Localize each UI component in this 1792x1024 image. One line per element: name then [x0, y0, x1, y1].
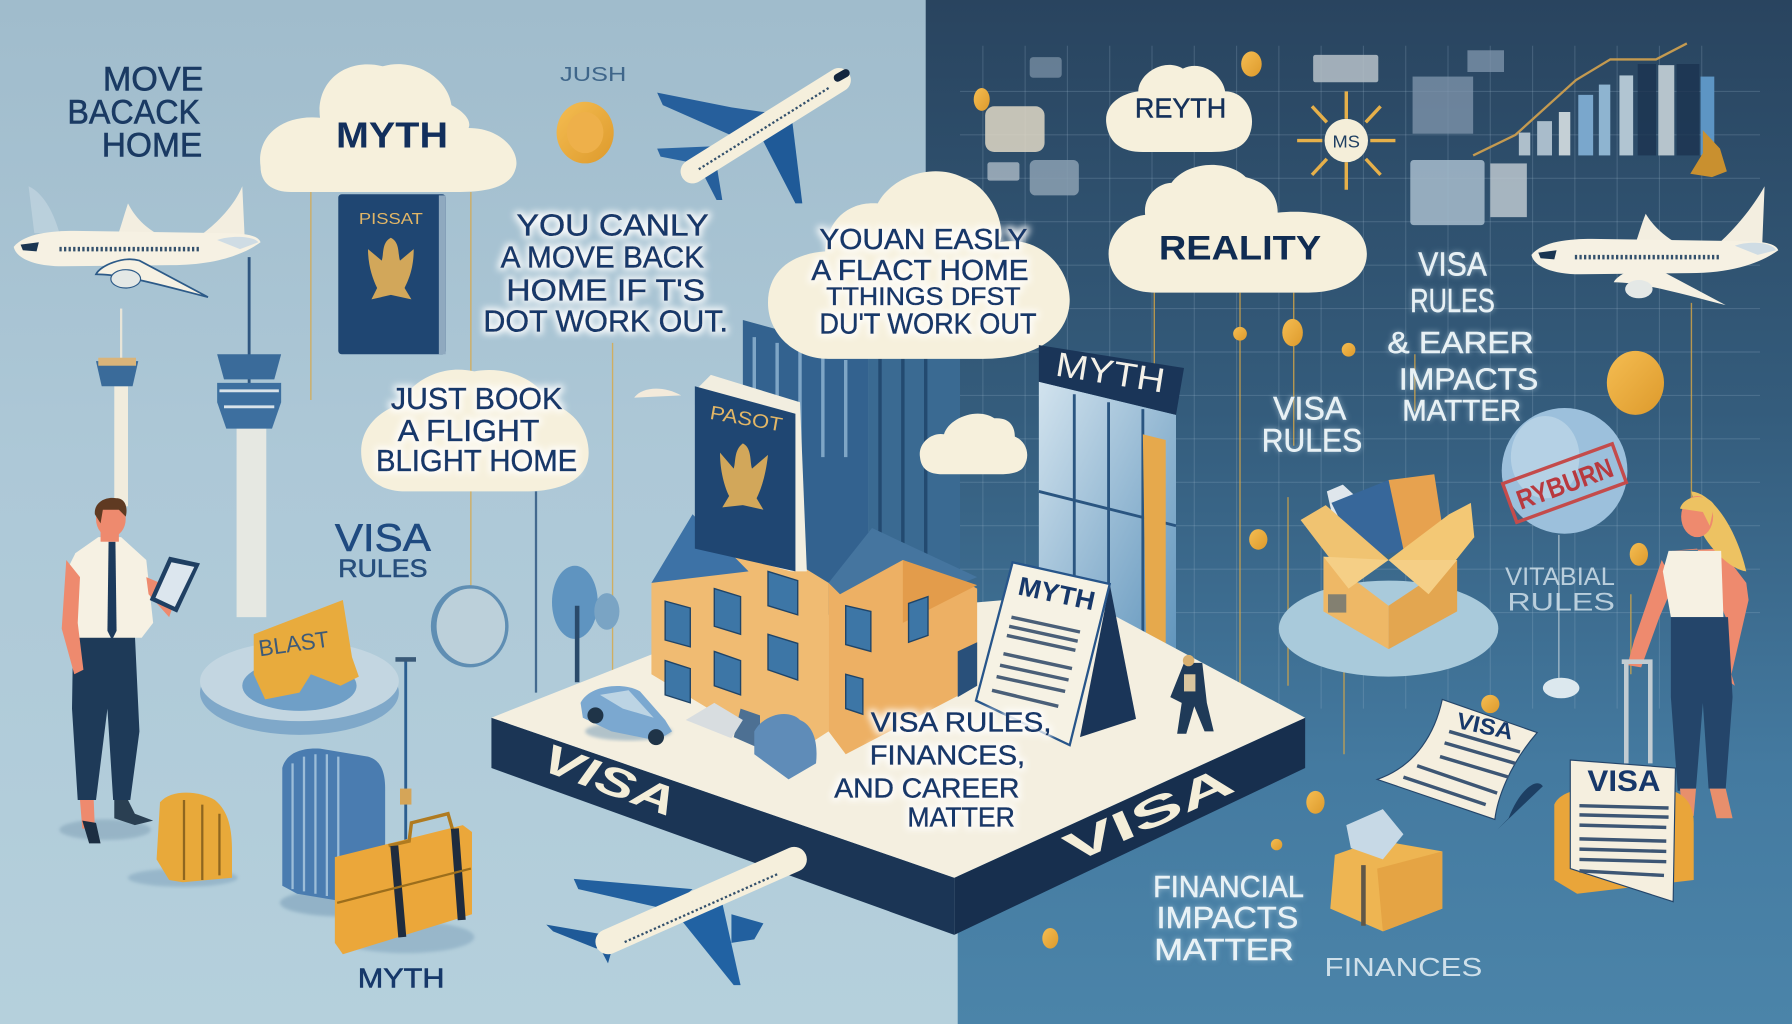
icon: small control tower: [96, 309, 138, 506]
label: myth on tower: MYTH: [1053, 346, 1167, 400]
text: visa rules career impacts: RULES: [1410, 283, 1495, 320]
person: man with tablet: [59, 498, 200, 843]
label: visa on right side: VISA: [1057, 757, 1240, 872]
document text lines: [1579, 806, 1669, 875]
icon: eagle emblem: [720, 443, 768, 510]
icon: small cloud: [920, 414, 1027, 474]
label: reyth: REYTH: [1135, 93, 1226, 124]
label: myth on document: MYTH: [1016, 571, 1098, 616]
text: visa rules career impacts: MATTER: [1402, 395, 1521, 428]
cloud: just book: [361, 370, 589, 491]
icon: large control tower: [217, 257, 281, 617]
label: visa rules left: VISA: [335, 517, 431, 560]
icon: airplane right: [1531, 186, 1778, 305]
text: visa rules finances career: AND CAREER: [834, 773, 1019, 804]
cloud: reality: [1109, 165, 1367, 293]
icon: tablet: [150, 557, 200, 613]
label: visa on left side: VISA: [536, 735, 683, 825]
label: stamp: RYBURN: [1512, 452, 1617, 516]
label: myth: MYTH: [336, 114, 448, 155]
icon: wrapped package: [1330, 809, 1442, 931]
text: vitabial rules: RULES: [1507, 588, 1615, 616]
icon: post base: [1543, 678, 1579, 698]
document text lines: [992, 617, 1080, 706]
text: you can only move back: YOU CANLY: [517, 207, 709, 242]
icon: myth document sign: [976, 562, 1136, 745]
icon: passport myth: [338, 194, 446, 354]
text: financial impacts: [1153, 869, 1304, 967]
label: visa: VISA: [1587, 765, 1661, 798]
building behind: [743, 320, 960, 640]
icon: car: [581, 686, 672, 745]
icon: clock disc: [431, 585, 509, 667]
text: financial impacts: MATTER: [1154, 932, 1294, 967]
platform: [491, 594, 1305, 935]
icon: gold coin top: [1241, 51, 1262, 77]
text: visa rules career impacts: & EARER: [1387, 325, 1534, 360]
icon: small gold coin: [974, 88, 990, 111]
icon: shrubs: [754, 714, 817, 779]
text: you can only move back: DOT WORK OUT.: [483, 303, 728, 338]
text: easy flight home: DU'T WORK OUT: [819, 309, 1037, 341]
icon: airplane top: [657, 73, 846, 203]
text: visa rules career impacts: VISA: [1418, 246, 1488, 283]
icon: entrance steps: [686, 703, 743, 738]
icon: passport on house: [695, 375, 807, 571]
icon: small orange suitcase: [128, 793, 238, 887]
text: financial impacts: FINANCIAL: [1153, 869, 1304, 904]
small wisp: [634, 389, 681, 398]
passport title: PASOT: [708, 402, 784, 436]
text: easy flight home: TTHINGS DFST: [826, 283, 1021, 311]
icon: gold coins: [1042, 319, 1664, 949]
heading: move back home: BACACK: [67, 93, 200, 131]
icon: house: [651, 514, 977, 779]
label: badge: MS: [1333, 131, 1360, 151]
text: visa rules reality: [1262, 390, 1362, 458]
panel: reality background: [926, 0, 1792, 1024]
text: visa rules finances career: [834, 706, 1051, 832]
icon: lamp post: [395, 657, 416, 862]
icon: visa paper: [1377, 699, 1543, 830]
icon: airplane bottom: [546, 859, 794, 985]
text: just book: A FLIGHT: [398, 413, 540, 448]
text: visa rules career impacts: IMPACTS: [1399, 362, 1538, 397]
text: just book: [376, 381, 577, 478]
text: easy flight home: YOUAN EASLY: [819, 224, 1027, 256]
reality grid: [960, 46, 1760, 709]
text: you can only move back: A MOVE BACK: [501, 239, 704, 274]
icon: blue suitcase: [280, 748, 406, 917]
text: you can only move back: HOME IF T'S: [506, 273, 705, 308]
text: visa rules finances career: FINANCES,: [870, 740, 1025, 771]
label: blast: BLAST: [257, 626, 331, 661]
heading: move back home: MOVE: [103, 60, 203, 98]
text: visa rules reality: VISA: [1273, 390, 1347, 426]
label: myth bottom: MYTH: [358, 962, 445, 993]
passport title: PISSAT: [359, 211, 423, 228]
cloud: easy flight home: [768, 171, 1070, 359]
cloud: myth: [260, 64, 516, 192]
icon: orange suitcase right: [1554, 789, 1694, 894]
icon: orange briefcase: [335, 814, 474, 954]
label: visa rules left: [335, 517, 431, 583]
icon: eagle emblem: [368, 238, 414, 299]
icon: airplane left: [14, 186, 261, 297]
icon: visa document: [1570, 760, 1675, 902]
text: easy flight home: [811, 224, 1037, 341]
icon: sun badge: [1297, 91, 1395, 190]
bar chart: [1473, 43, 1727, 177]
heading: move back home: HOME: [102, 127, 202, 165]
text: financial impacts: IMPACTS: [1157, 900, 1298, 935]
icon: glass tower with myth sign: [1039, 345, 1184, 665]
text: just book: BLIGHT HOME: [376, 443, 577, 478]
text: vitabial rules: VITABIAL: [1505, 563, 1615, 591]
icon: pedestal with blast card: [200, 600, 399, 735]
icon: floating document cards: [985, 50, 1527, 225]
text: just book: JUST BOOK: [391, 381, 563, 416]
icon: suitcase handle: [1622, 662, 1653, 763]
label: visa rules left: RULES: [338, 555, 427, 583]
panel: myth background: [0, 0, 960, 1024]
text: vitabial rules: [1505, 563, 1615, 616]
icon: gold emblem: [1690, 130, 1727, 177]
heading: move back home: [67, 60, 203, 165]
cloud: reyth: [1106, 65, 1252, 152]
icon: tree: [552, 566, 619, 682]
connector lines: [311, 171, 1691, 754]
paper text lines: [1403, 731, 1520, 805]
text: visa rules career impacts: [1387, 246, 1538, 428]
icon: open box on pedestal: [1279, 474, 1498, 677]
label: visa: VISA: [1454, 707, 1516, 745]
text: visa rules finances career: MATTER: [907, 801, 1015, 832]
label: finances: FINANCES: [1325, 952, 1482, 982]
label: reality: REALITY: [1159, 229, 1321, 267]
text: visa rules finances career: VISA RULES,: [871, 706, 1051, 737]
icon: couple on platform: [1170, 655, 1214, 734]
text: easy flight home: A FLACT HOME: [811, 255, 1029, 287]
label: jush: JUSH: [560, 63, 626, 86]
icon: globe with stamp: [1502, 408, 1627, 534]
person: woman with luggage: [1622, 491, 1749, 818]
text: visa rules reality: RULES: [1262, 422, 1362, 458]
icon: gold coin: [557, 102, 614, 163]
text: you can only move back: [483, 207, 728, 338]
